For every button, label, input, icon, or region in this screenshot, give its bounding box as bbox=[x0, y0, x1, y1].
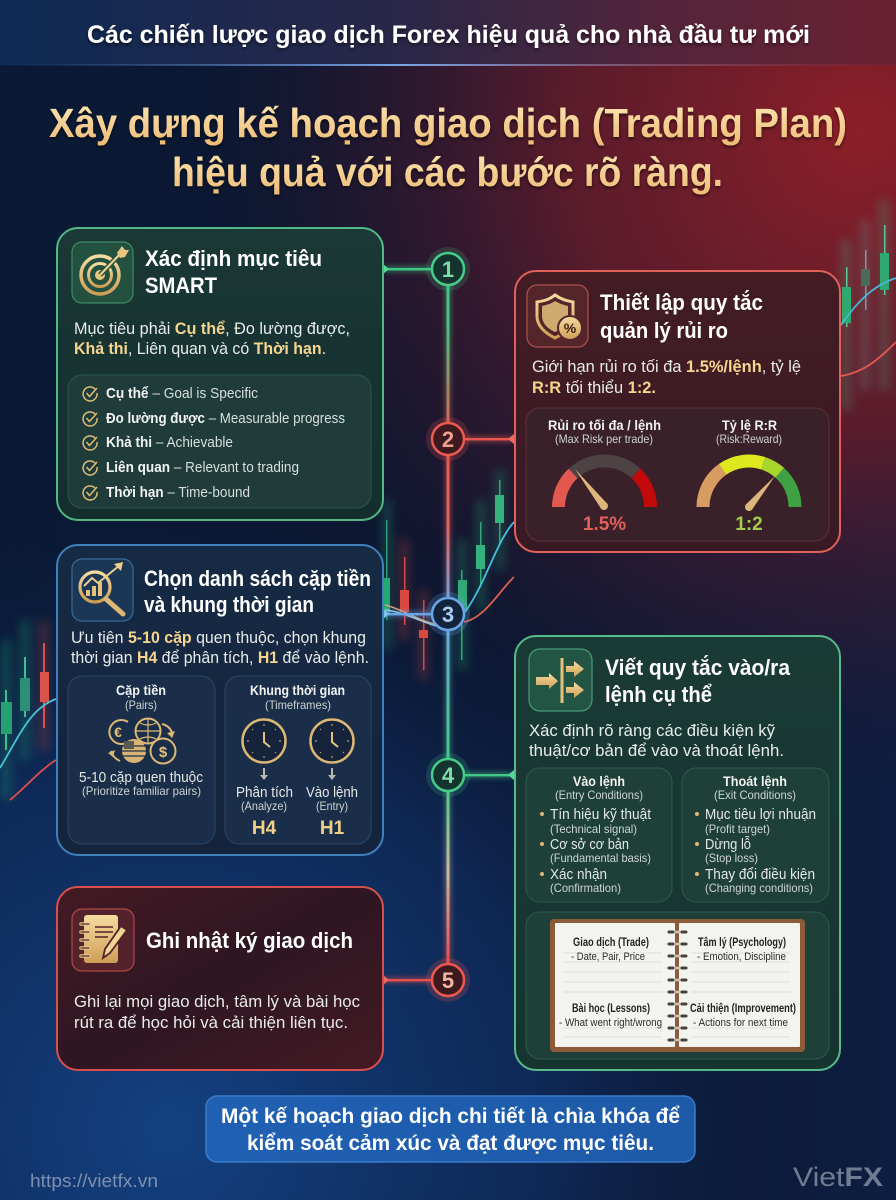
notebook bbox=[550, 919, 805, 1052]
title: Xây dựng kế hoạch giao dịch (Trading Plan) bbox=[49, 100, 847, 146]
description: Ưu tiên 5-10 cặp quen thuộc, chọn khung bbox=[71, 629, 366, 647]
sub-panel: exit: Mục tiêu lợi nhuận bbox=[705, 807, 816, 823]
sub-panel: timeframes bbox=[225, 676, 371, 844]
panel: risk rules bbox=[515, 271, 840, 552]
icon: entry exit arrows bbox=[529, 649, 592, 711]
heading bbox=[145, 246, 322, 298]
icon: clock H4: Phân tích bbox=[236, 785, 293, 801]
step 4 marker: 4 bbox=[442, 763, 455, 788]
description: Giới hạn rủi ro tối đa 1.5%/lệnh, tỷ lệ bbox=[532, 358, 801, 376]
description bbox=[74, 993, 360, 1032]
icon: currencies: € bbox=[114, 724, 122, 740]
description: Xác định rõ ràng các điều kiện kỹ bbox=[529, 722, 776, 740]
checklist: Thời hạn – Time-bound bbox=[106, 484, 250, 501]
icon: shield: % bbox=[564, 320, 577, 336]
sub-panel: entry: (Confirmation) bbox=[550, 881, 621, 895]
sub-panel: exit: (Exit Conditions) bbox=[714, 788, 796, 802]
step 1 marker: 1 bbox=[442, 257, 454, 282]
gauge: risk reward bbox=[703, 418, 795, 535]
description bbox=[532, 358, 801, 397]
icon: clock H1 bbox=[306, 720, 358, 839]
notebook: - Emotion, Discipline bbox=[697, 951, 786, 963]
sub-panel: exit: Thay đổi điều kiện bbox=[705, 867, 815, 883]
sub-panel: entry: Tín hiệu kỹ thuật bbox=[550, 807, 651, 823]
sub-panel: pairs: 5-10 cặp quen thuộc bbox=[79, 770, 203, 786]
icon: shield bbox=[527, 285, 588, 347]
icon: clock H4: H4 bbox=[252, 818, 277, 839]
panel: pairs and timeframes bbox=[57, 545, 383, 855]
sub-panel: entry: Cơ sở cơ bản bbox=[550, 837, 629, 853]
notebook: - What went right/wrong bbox=[559, 1017, 662, 1029]
description bbox=[71, 629, 369, 667]
heading: Chọn danh sách cặp tiền bbox=[144, 566, 371, 591]
notebook: Giao dịch (Trade) bbox=[573, 937, 649, 949]
sub-panel: entry: Xác nhận bbox=[550, 867, 607, 883]
sub-panel: exit bbox=[682, 768, 829, 902]
icon: journal and pencil bbox=[72, 909, 134, 971]
step 1 marker bbox=[426, 247, 470, 291]
website url: https://vietfx.vn bbox=[30, 1171, 158, 1191]
step 2 marker: 2 bbox=[442, 427, 454, 452]
panel: trading journal bbox=[57, 887, 383, 1070]
title: hiệu quả với các bước rõ ràng. bbox=[172, 149, 723, 195]
gauge: risk reward: Tỷ lệ R:R bbox=[722, 418, 777, 433]
icon: target bbox=[72, 242, 133, 303]
sub-panel: entry: Vào lệnh bbox=[573, 774, 625, 789]
gauge: risk reward: 1:2 bbox=[735, 514, 763, 535]
icon: clock H1: H1 bbox=[320, 818, 345, 839]
sub-panel: exit: Dừng lỗ bbox=[705, 836, 751, 853]
step 2 marker bbox=[426, 417, 470, 461]
callout bbox=[206, 1096, 695, 1162]
notebook: Cải thiện (Improvement) bbox=[690, 1003, 796, 1015]
header text: Các chiến lược giao dịch Forex hiệu quả cho nhà đầu tư mới bbox=[87, 21, 810, 49]
sub-panel: pairs: Cặp tiền bbox=[116, 683, 166, 698]
gauge: max risk: (Max Risk per trade) bbox=[555, 432, 653, 446]
heading: lệnh cụ thể bbox=[605, 682, 712, 707]
description: rút ra để học hỏi và cải thiện liên tục. bbox=[74, 1014, 348, 1032]
icon: clock H1: (Entry) bbox=[316, 799, 348, 813]
icon: clock H4 bbox=[236, 720, 293, 839]
sub-panel: pairs bbox=[68, 676, 215, 844]
heading bbox=[605, 655, 791, 707]
heading: SMART bbox=[145, 273, 218, 298]
step 3 marker: 3 bbox=[442, 602, 454, 627]
step 5 marker: 5 bbox=[442, 968, 454, 993]
checklist: Khả thi – Achievable bbox=[106, 434, 233, 451]
icon: currencies bbox=[108, 718, 176, 764]
sub-panel: timeframes: Khung thời gian bbox=[250, 683, 345, 698]
sub-panel: entry: (Entry Conditions) bbox=[555, 788, 643, 802]
description: Ghi lại mọi giao dịch, tâm lý và bài học bbox=[74, 993, 360, 1011]
notebook: - Actions for next time bbox=[693, 1017, 788, 1029]
step 5 marker bbox=[426, 958, 470, 1002]
gauge: max risk bbox=[548, 418, 661, 535]
checklist: Đo lường được – Measurable progress bbox=[106, 410, 345, 427]
sub-panel: exit: (Stop loss) bbox=[705, 851, 758, 865]
panel: SMART goals bbox=[57, 228, 383, 520]
notebook: - Date, Pair, Price bbox=[571, 951, 645, 963]
icon: currencies: $ bbox=[159, 744, 168, 761]
panel: entry and exit rules bbox=[515, 636, 840, 1070]
heading: Thiết lập quy tắc bbox=[600, 290, 763, 315]
gauge: max risk: 1.5% bbox=[583, 514, 626, 535]
sub-panel: entry: (Technical signal) bbox=[550, 822, 637, 836]
notebook: Bài học (Lessons) bbox=[572, 1003, 650, 1015]
sub-panel: entry: (Fundamental basis) bbox=[550, 851, 651, 865]
background candlestick chart bbox=[0, 200, 896, 800]
header band bbox=[0, 0, 896, 66]
description: thời gian H4 để phân tích, H1 để vào lệnh. bbox=[71, 649, 369, 667]
notebook panel bbox=[526, 912, 829, 1059]
description: Mục tiêu phải Cụ thể, Đo lường được, bbox=[74, 320, 350, 338]
icon: clock H1: Vào lệnh bbox=[306, 785, 358, 801]
description: R:R tối thiểu 1:2. bbox=[532, 379, 656, 397]
callout: Một kế hoạch giao dịch chi tiết là chìa khóa để bbox=[221, 1105, 680, 1128]
heading bbox=[144, 566, 371, 617]
step 3 marker bbox=[426, 592, 470, 636]
logo: VietFX bbox=[793, 1162, 883, 1192]
checklist: Cụ thể – Goal is Specific bbox=[106, 385, 258, 402]
step 4 marker bbox=[426, 753, 470, 797]
heading: quản lý rủi ro bbox=[600, 318, 728, 343]
title bbox=[49, 100, 847, 195]
sub-panel: exit: (Changing conditions) bbox=[705, 881, 813, 895]
icon: clock H4: (Analyze) bbox=[241, 799, 287, 813]
heading: và khung thời gian bbox=[144, 592, 314, 617]
heading: Xác định mục tiêu bbox=[145, 246, 322, 271]
description bbox=[529, 722, 784, 760]
heading: Viết quy tắc vào/ra bbox=[605, 655, 791, 680]
description: thuật/cơ bản để vào và thoát lệnh. bbox=[529, 742, 784, 760]
notebook: Tâm lý (Psychology) bbox=[698, 937, 786, 949]
gauge: max risk: Rủi ro tối đa / lệnh bbox=[548, 418, 661, 433]
description: Khả thi, Liên quan và có Thời hạn. bbox=[74, 340, 326, 358]
gauge: risk reward: (Risk:Reward) bbox=[716, 432, 782, 446]
sub-panel: pairs: (Pairs) bbox=[125, 698, 157, 712]
sub-panel: exit: (Profit target) bbox=[705, 822, 770, 836]
sub-panel: pairs: (Prioritize familiar pairs) bbox=[82, 784, 201, 798]
heading: Ghi nhật ký giao dịch bbox=[146, 928, 353, 953]
gauges panel bbox=[526, 408, 829, 541]
checklist bbox=[68, 375, 371, 508]
description bbox=[74, 320, 350, 358]
callout: kiểm soát cảm xúc và đạt được mục tiêu. bbox=[247, 1132, 654, 1155]
icon: magnifier chart bbox=[72, 559, 133, 621]
heading bbox=[600, 290, 763, 343]
sub-panel: entry bbox=[526, 768, 672, 902]
sub-panel: exit: Thoát lệnh bbox=[723, 774, 787, 789]
timeline bbox=[383, 247, 514, 1002]
sub-panel: timeframes: (Timeframes) bbox=[265, 698, 331, 712]
checklist: Liên quan – Relevant to trading bbox=[106, 459, 299, 476]
